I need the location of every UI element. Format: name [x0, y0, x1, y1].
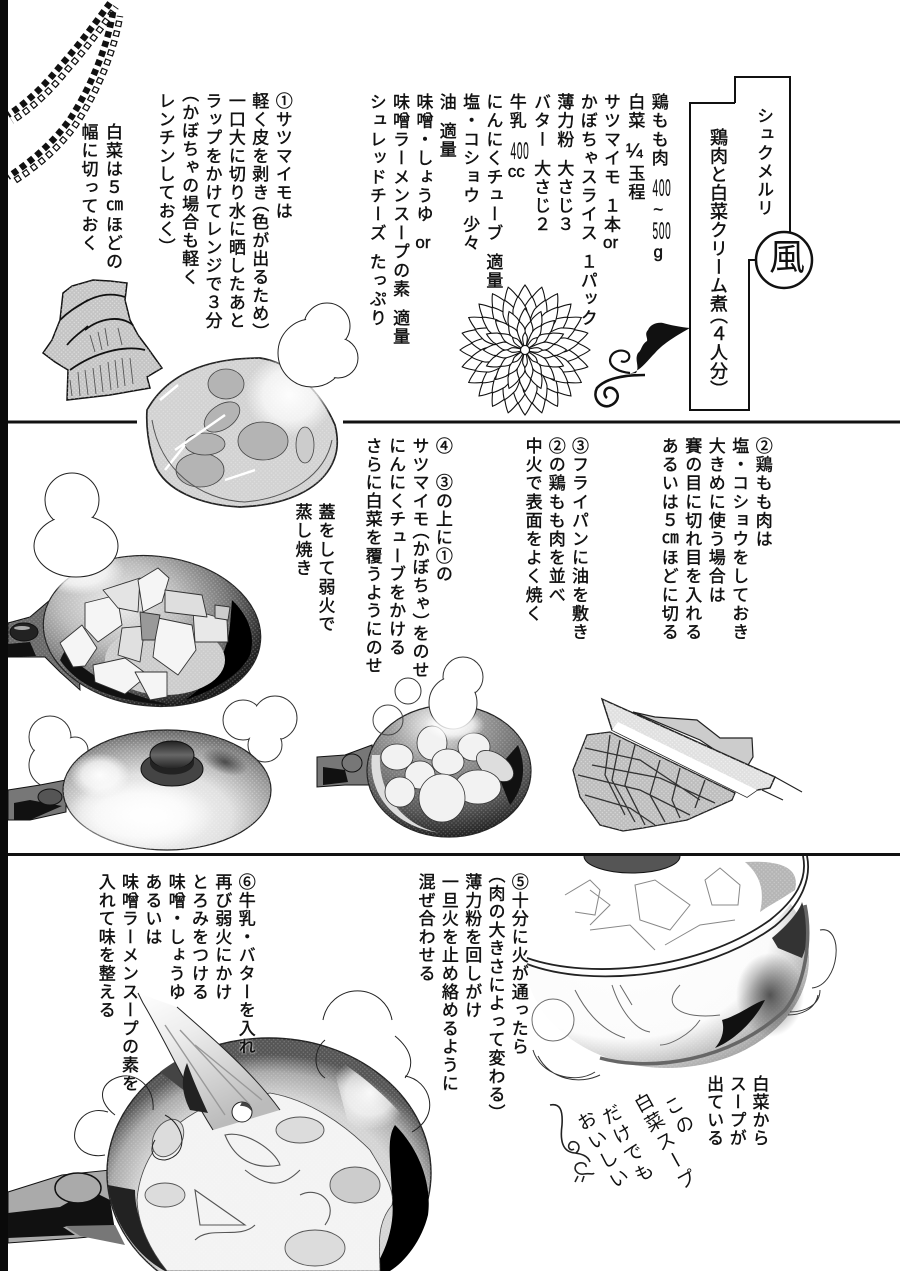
pan body: [568, 904, 809, 1068]
cabbage cutting note: 幅に切っておく: [78, 123, 98, 252]
final pan with cream stew: [8, 991, 431, 1271]
step 1 text: レンチンしておく ）: [156, 92, 175, 257]
step 2 text: 賽の目に切れ目を入れる: [682, 437, 701, 642]
ingredient list: 味噌ラーメンスープの素 適量: [390, 93, 409, 346]
soup note: 白菜から: [750, 1075, 768, 1147]
step 1 text: ①サツマイモは: [273, 92, 292, 220]
ingredient list: 500: [653, 218, 672, 245]
chicken through lid: [565, 868, 740, 950]
pan with seared chicken: [317, 657, 531, 837]
ingredient list: かぼちゃスライス １パック: [578, 93, 597, 328]
steam-cook note: 蒸し焼き: [292, 503, 312, 578]
step 6 text: 味噌・しょうゆ: [166, 873, 185, 1001]
soup note: 出ている: [704, 1075, 723, 1147]
step 4 text: [363, 437, 452, 679]
cabbage cutting note: 白菜は５㎝ほどの: [103, 123, 122, 271]
pan: [367, 705, 531, 837]
handwritten comment: だけでも: [596, 1102, 657, 1189]
lidded pan: [8, 696, 297, 851]
ingredient list: 薄力粉 大さじ３: [554, 93, 573, 234]
step 6 text: [96, 873, 257, 1093]
steam: [429, 657, 483, 729]
cabbage cutting note: [78, 123, 123, 271]
step 5 text: [416, 866, 530, 1122]
step 4 text: ④ ③の上に①の: [433, 437, 452, 583]
steam: [532, 999, 574, 1041]
step 6 text: 入れて味を整える: [96, 873, 115, 1019]
heading: dish name: 鶏肉と白菜クリーム煮（ ４人分 ）: [708, 128, 728, 398]
pan: [107, 1038, 431, 1271]
right steam: [316, 991, 430, 1132]
wooden spatula: [138, 993, 280, 1130]
step 6 text: あるいは: [142, 873, 161, 946]
soup note: スープが: [727, 1075, 746, 1147]
step 5 text: （ 肉の大きさによって変わる ）: [486, 866, 504, 1122]
ingredient list: にんにくチューブ 適量: [483, 93, 502, 290]
ingredient list: 鶏もも肉 ~ g: [649, 93, 668, 263]
step 5 text: 一旦火を止め絡めるように: [439, 873, 458, 1093]
handwritten comment: [571, 1090, 700, 1196]
wrapped sweet potato bowl: [147, 303, 358, 507]
step 4 text: にんにくチューブをかける: [386, 437, 405, 657]
handle: [8, 1170, 110, 1243]
step 4 text: サツマイモ（ かぼちゃ ）をのせ: [409, 437, 428, 679]
handle: [317, 745, 372, 787]
step 2 text: [659, 437, 772, 642]
soup note: [704, 1075, 770, 1147]
step 1 text: （ かぼちゃの場合も軽く: [179, 85, 198, 286]
step 1 text: [156, 85, 292, 341]
ingredient list: [367, 93, 672, 346]
handwritten comment: 白菜スープ: [628, 1090, 700, 1196]
frying pan with cabbage and chicken: [8, 473, 268, 717]
swirl ornament beside soup note: [550, 1105, 594, 1182]
steam right: [223, 696, 297, 762]
step 2 text: あるいは５㎝ほどに切る: [659, 437, 678, 642]
ingredient list: 味噌・しょうゆ or: [413, 93, 432, 251]
step 6 text: 味噌ラーメンスープの素を: [119, 873, 138, 1093]
ingredient list: 牛乳 cc: [507, 93, 526, 180]
ingredient list: 400: [653, 175, 672, 202]
ingredient list: 塩・コショウ 少々: [460, 93, 479, 253]
steam-cook note: [292, 503, 335, 634]
chicken pieces: [381, 726, 519, 822]
lid knob: [584, 856, 680, 874]
left steam: [75, 1076, 182, 1160]
handwritten comment: おいしい: [571, 1108, 632, 1195]
steam-cook note: 蓋をして弱火で: [316, 503, 334, 634]
step 2 text: ②鶏もも肉は: [753, 437, 772, 549]
cream stew: [137, 1093, 393, 1271]
ingredient list: バター 大さじ２: [531, 93, 550, 234]
step 4 text: さらに白菜を覆うようにのせ: [363, 437, 382, 675]
title frame: [690, 77, 812, 410]
lid: [63, 730, 271, 850]
step 1 text: ラップをかけてレンジで３分: [202, 92, 221, 330]
chicken pieces: [60, 568, 230, 700]
ingredient list: 400: [511, 138, 530, 165]
seal circle for 風: [756, 232, 812, 288]
knife: [602, 699, 775, 797]
step 2 text: 大きめに使う場合は: [706, 437, 725, 604]
step 2 text: 塩・コショウをしておき: [729, 437, 748, 642]
steam left: [29, 716, 88, 788]
scroll ornament: [595, 323, 690, 406]
step 1 text: 一口大に切り水に晒したあと: [226, 92, 245, 330]
ingredient list: 白菜 ¼ 玉程: [623, 93, 645, 202]
handle: [8, 600, 80, 690]
step 3 text: ②の鶏もも肉を並べ: [546, 437, 565, 604]
left page edge: [0, 0, 8, 1271]
glass lid: [771, 896, 790, 922]
step 6 text: 再び弱火にかけ: [212, 873, 231, 1001]
chrysanthemum flower ornament: [436, 261, 614, 439]
step 6 text: とろみをつける: [189, 873, 208, 1001]
bowl steam: [278, 303, 358, 387]
decorative chain borders, top left: [8, 3, 120, 182]
ingredient list: 油 適量: [437, 93, 456, 159]
handwritten comment: この: [658, 1093, 698, 1141]
step 5 text: 混ぜ合わせる: [416, 873, 435, 983]
ingredient list: シュレッドチーズ たっぷり: [367, 93, 386, 328]
panel divider lines: [8, 420, 900, 856]
seal character 風: 風: [764, 238, 805, 274]
step 1 text: 軽く皮を剥き（ 色が出るため ）: [249, 92, 268, 341]
step 5 text: 薄力粉を回しがけ: [462, 873, 481, 1019]
step 3 text: [523, 437, 589, 642]
step 6 text: ⑥牛乳・バターを入れ: [236, 873, 255, 1056]
step 5 text: ⑤十分に火が通ったら: [509, 873, 528, 1056]
lid knob: [141, 752, 203, 786]
cabbage illustration: [43, 280, 162, 400]
steam cloud: [34, 473, 118, 577]
scored chicken with knife: [573, 699, 802, 831]
ingredient list: サツマイモ １本 or: [601, 93, 620, 251]
title: シュクメルリ: シュクメルリ: [754, 107, 773, 217]
pan body: [36, 545, 268, 717]
pan with lid and white cabbage soup: [520, 839, 836, 1080]
step 3 text: 中火で表面をよく焼く: [523, 437, 542, 623]
handle: [8, 780, 66, 820]
step 3 text: ③フライパンに油を敷き: [569, 437, 588, 642]
